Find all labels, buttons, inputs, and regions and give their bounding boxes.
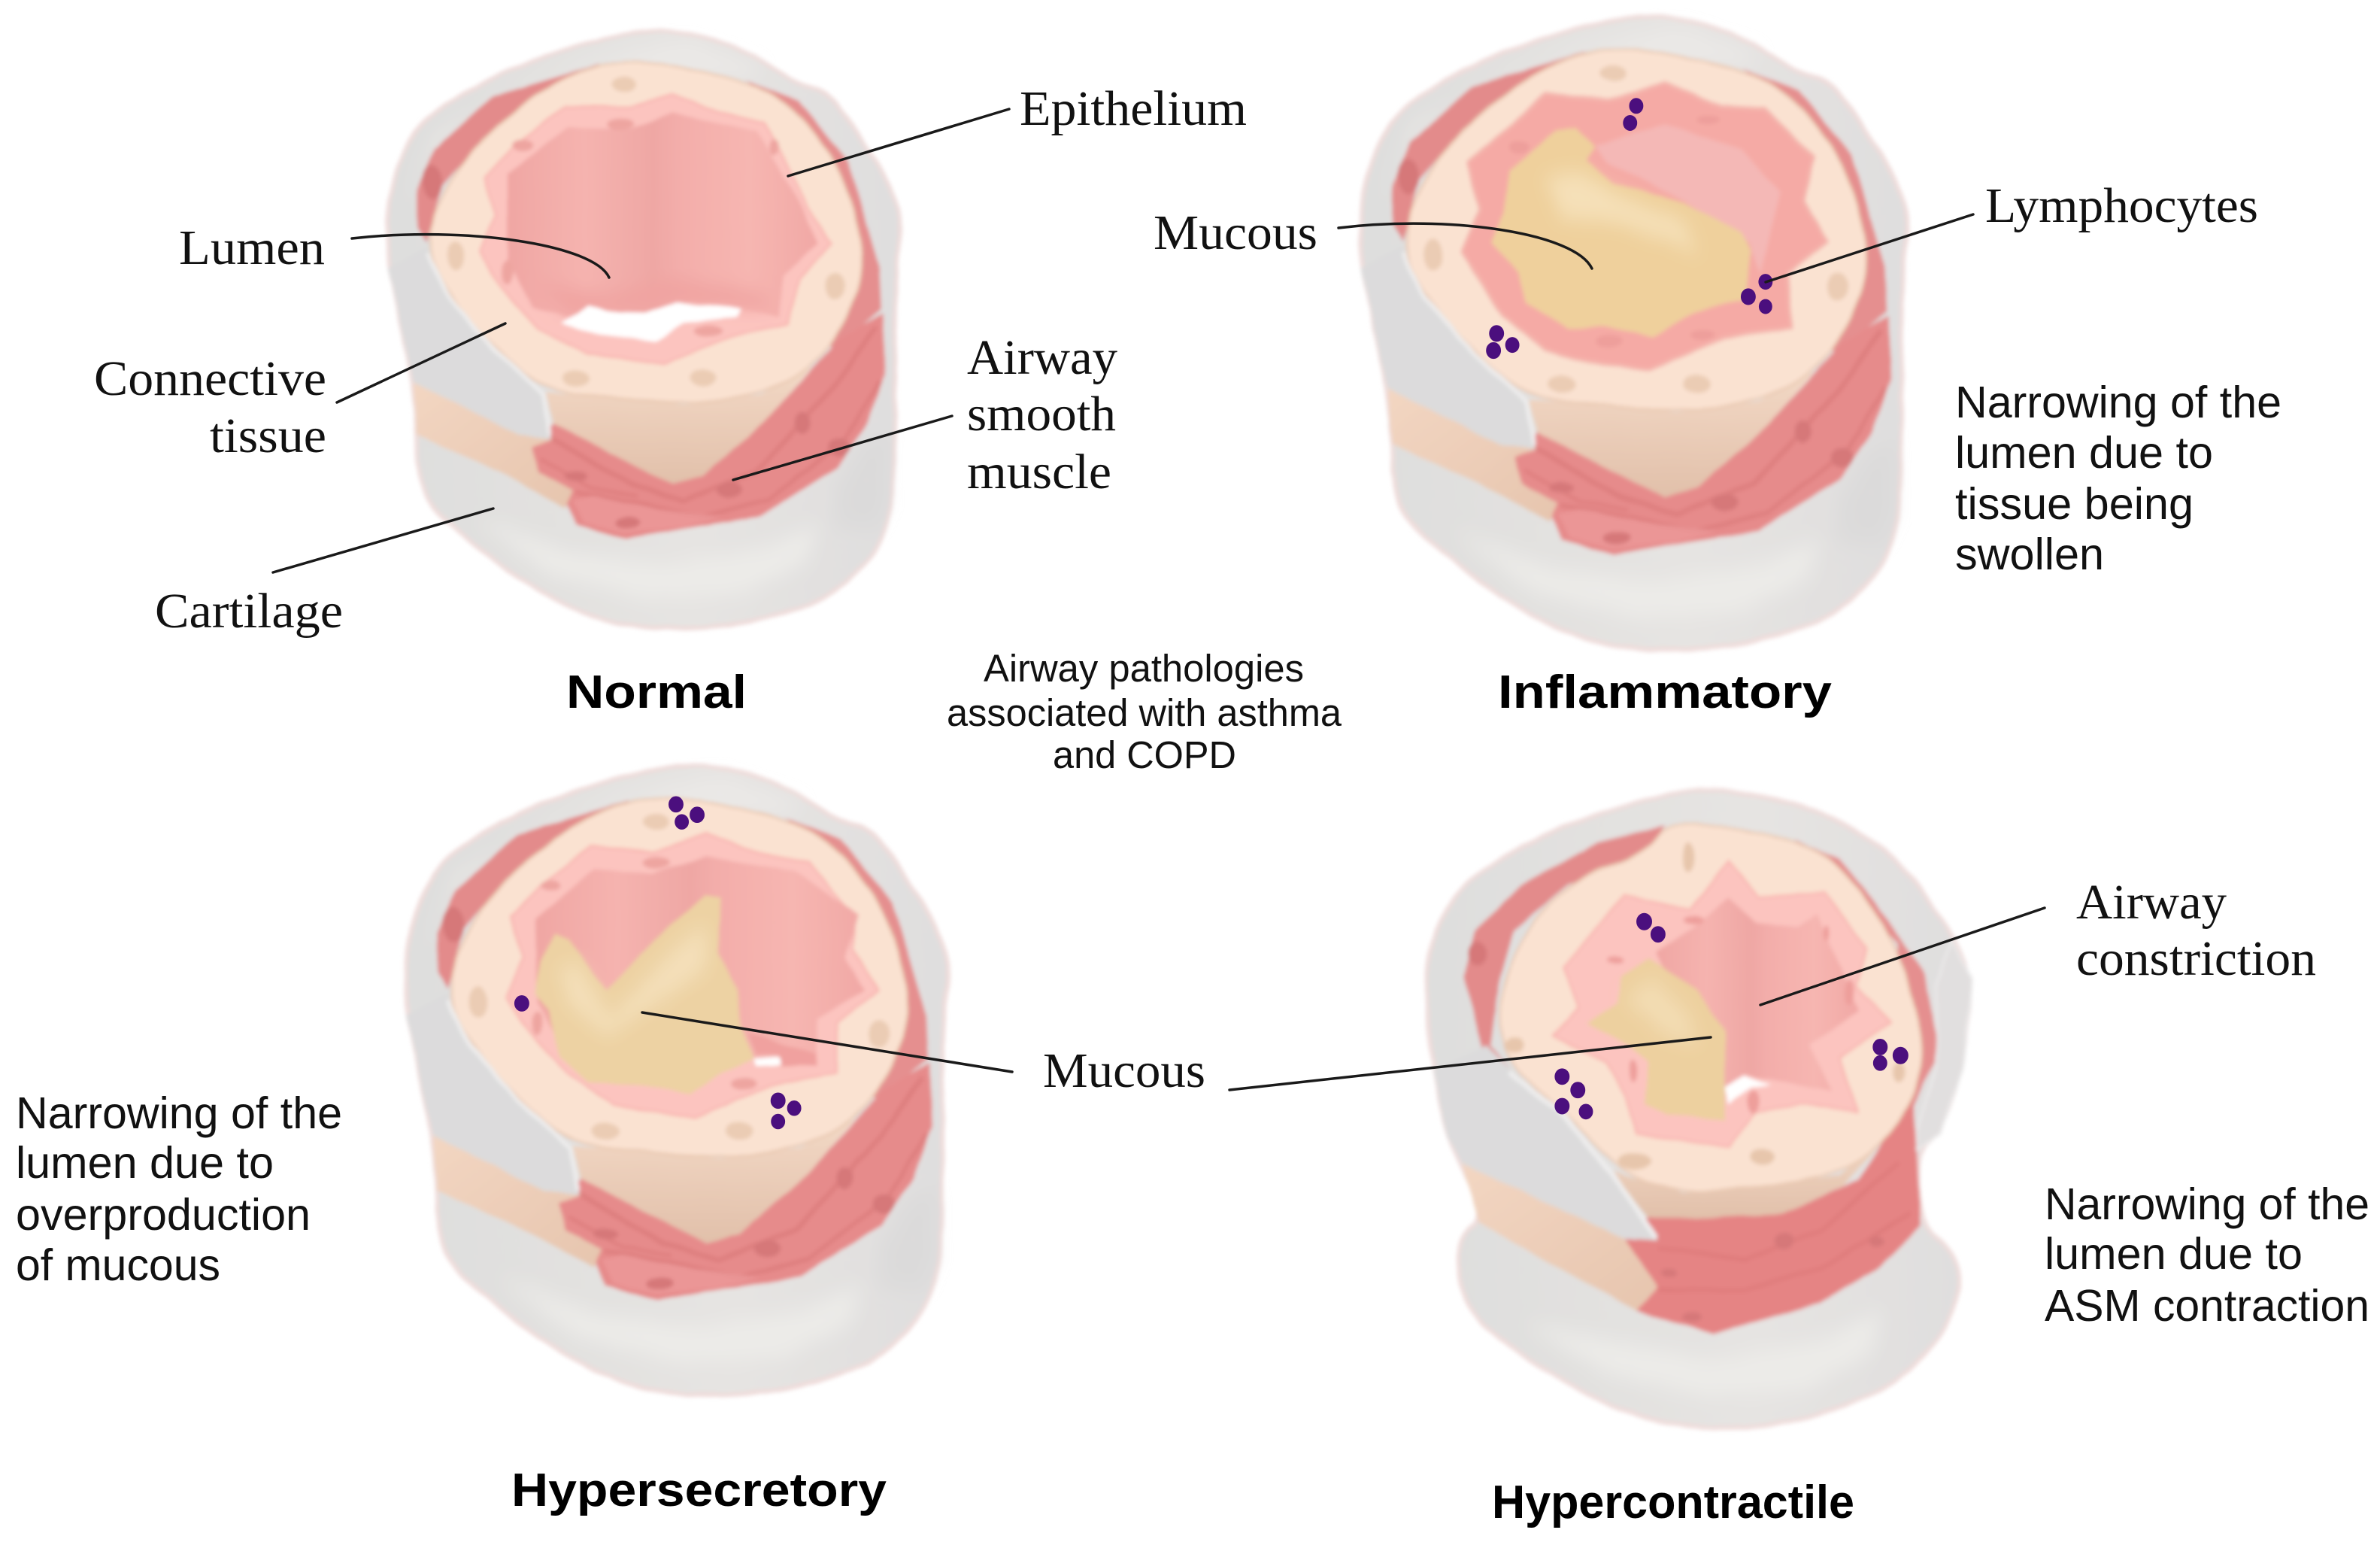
label: Mucous (centre): Mucous bbox=[1043, 1043, 1205, 1098]
heading: Hypercontractile: Hypercontractile bbox=[1492, 1477, 1854, 1528]
leader line: lumen bbox=[352, 235, 609, 278]
label: Airway constriction bbox=[2076, 875, 2316, 986]
label: Airway smooth muscle: Airway bbox=[967, 330, 1117, 385]
airway opening bbox=[1725, 1076, 1771, 1104]
note: swollen tissue: swollen bbox=[1955, 530, 2104, 579]
heading: Normal: Normal bbox=[566, 666, 747, 718]
folded epithelium bbox=[1552, 861, 1892, 1146]
leader line: cartilage bbox=[273, 508, 493, 572]
leader line: airway constriction bbox=[1760, 908, 2045, 1005]
lymphocytes bbox=[515, 797, 801, 1128]
cone bbox=[1606, 1129, 1893, 1218]
airway illustration: normal bbox=[387, 32, 900, 628]
note: ASM contraction: ASM contraction bbox=[2045, 1281, 2369, 1331]
label: Connective tissue: Connective bbox=[94, 351, 326, 406]
airway illustration: hypersecretory bbox=[406, 766, 947, 1395]
central caption bbox=[947, 647, 1342, 776]
lumen wall bbox=[507, 113, 818, 317]
note: overproduction of mucous: Narrowing of the bbox=[16, 1088, 342, 1138]
constricted lumen bbox=[1656, 897, 1859, 1091]
label: Epithelium: Epithelium bbox=[1020, 81, 1247, 136]
label: Lumen: Lumen bbox=[179, 220, 325, 275]
lumen wall bbox=[535, 857, 866, 1078]
label: Airway constriction: constriction bbox=[2076, 931, 2316, 986]
narrowed lumen bbox=[1596, 124, 1780, 273]
connective tissue disc bbox=[1500, 824, 1922, 1191]
leader line: epithelium bbox=[788, 109, 1009, 176]
peach band bbox=[1462, 1163, 1657, 1311]
leader line: lymphocytes bbox=[1766, 214, 1973, 282]
leader line: hypersecretory mucous bbox=[642, 1012, 1012, 1072]
note: swollen tissue: tissue being bbox=[1955, 479, 2194, 529]
note: swollen tissue: lumen due to bbox=[1955, 428, 2213, 478]
label: Airway smooth muscle: muscle bbox=[967, 445, 1111, 499]
heading: Hypersecretory: Hypersecretory bbox=[511, 1465, 887, 1516]
airway wall: cartilage, muscle, connective tissue bbox=[387, 32, 900, 628]
label: Mucous (inflammatory): Mucous bbox=[1154, 205, 1317, 260]
label: Connective tissue: tissue bbox=[210, 408, 326, 463]
central caption: and COPD bbox=[1053, 733, 1236, 776]
airway wall bbox=[1360, 17, 1907, 649]
note: ASM contraction: Narrowing of the bbox=[2045, 1179, 2369, 1229]
note: ASM contraction bbox=[2045, 1179, 2369, 1331]
mucous plug bbox=[1492, 128, 1751, 337]
central caption: Airway pathologies bbox=[984, 647, 1304, 690]
note: swollen tissue: Narrowing of the bbox=[1955, 378, 2281, 427]
upper muscle bbox=[1464, 825, 1666, 1070]
leader line: airway smooth muscle bbox=[733, 416, 952, 480]
label: Cartilage: Cartilage bbox=[155, 584, 343, 639]
airway illustration: hypercontractile bbox=[1426, 791, 1972, 1428]
label: Airway constriction: Airway bbox=[2076, 875, 2227, 930]
lymphocytes bbox=[1487, 99, 1772, 358]
leader line: connective tissue bbox=[337, 323, 505, 402]
epithelium ring bbox=[481, 95, 832, 363]
label: Lymphocytes: Lymphocytes bbox=[1985, 178, 2258, 233]
lumen opening bbox=[561, 302, 741, 342]
note: overproduction of mucous: lumen due to bbox=[16, 1138, 274, 1188]
label: Connective tissue bbox=[94, 351, 326, 463]
note: ASM contraction: lumen due to bbox=[2045, 1229, 2303, 1279]
note: overproduction of mucous bbox=[16, 1088, 342, 1290]
label: Airway smooth muscle bbox=[967, 330, 1117, 499]
leader line: inflammatory mucous bbox=[1339, 223, 1592, 269]
note: overproduction of mucous: of mucous bbox=[16, 1240, 220, 1290]
label: Airway smooth muscle: smooth bbox=[967, 387, 1116, 442]
airway opening bbox=[754, 1057, 781, 1066]
lymphocytes bbox=[1555, 914, 1908, 1119]
airway wall bbox=[406, 766, 947, 1395]
note: swollen tissue bbox=[1955, 378, 2281, 579]
heading: Inflammatory: Inflammatory bbox=[1498, 666, 1833, 718]
front cartilage flap bbox=[1433, 1045, 1657, 1239]
swollen epithelium bbox=[1461, 83, 1828, 369]
contracted smooth muscle bbox=[1625, 1096, 1921, 1334]
airway illustration: inflammatory bbox=[1360, 17, 1907, 649]
note: overproduction of mucous: overproduction bbox=[16, 1190, 311, 1240]
mucous plug bbox=[535, 896, 754, 1094]
cartilage silhouette bbox=[1426, 791, 1969, 1428]
mucous plug bbox=[1587, 958, 1725, 1121]
central caption: associated with asthma bbox=[947, 691, 1342, 734]
epithelium bbox=[506, 833, 878, 1117]
leader line: hypercontractile mucous bbox=[1229, 1037, 1711, 1090]
